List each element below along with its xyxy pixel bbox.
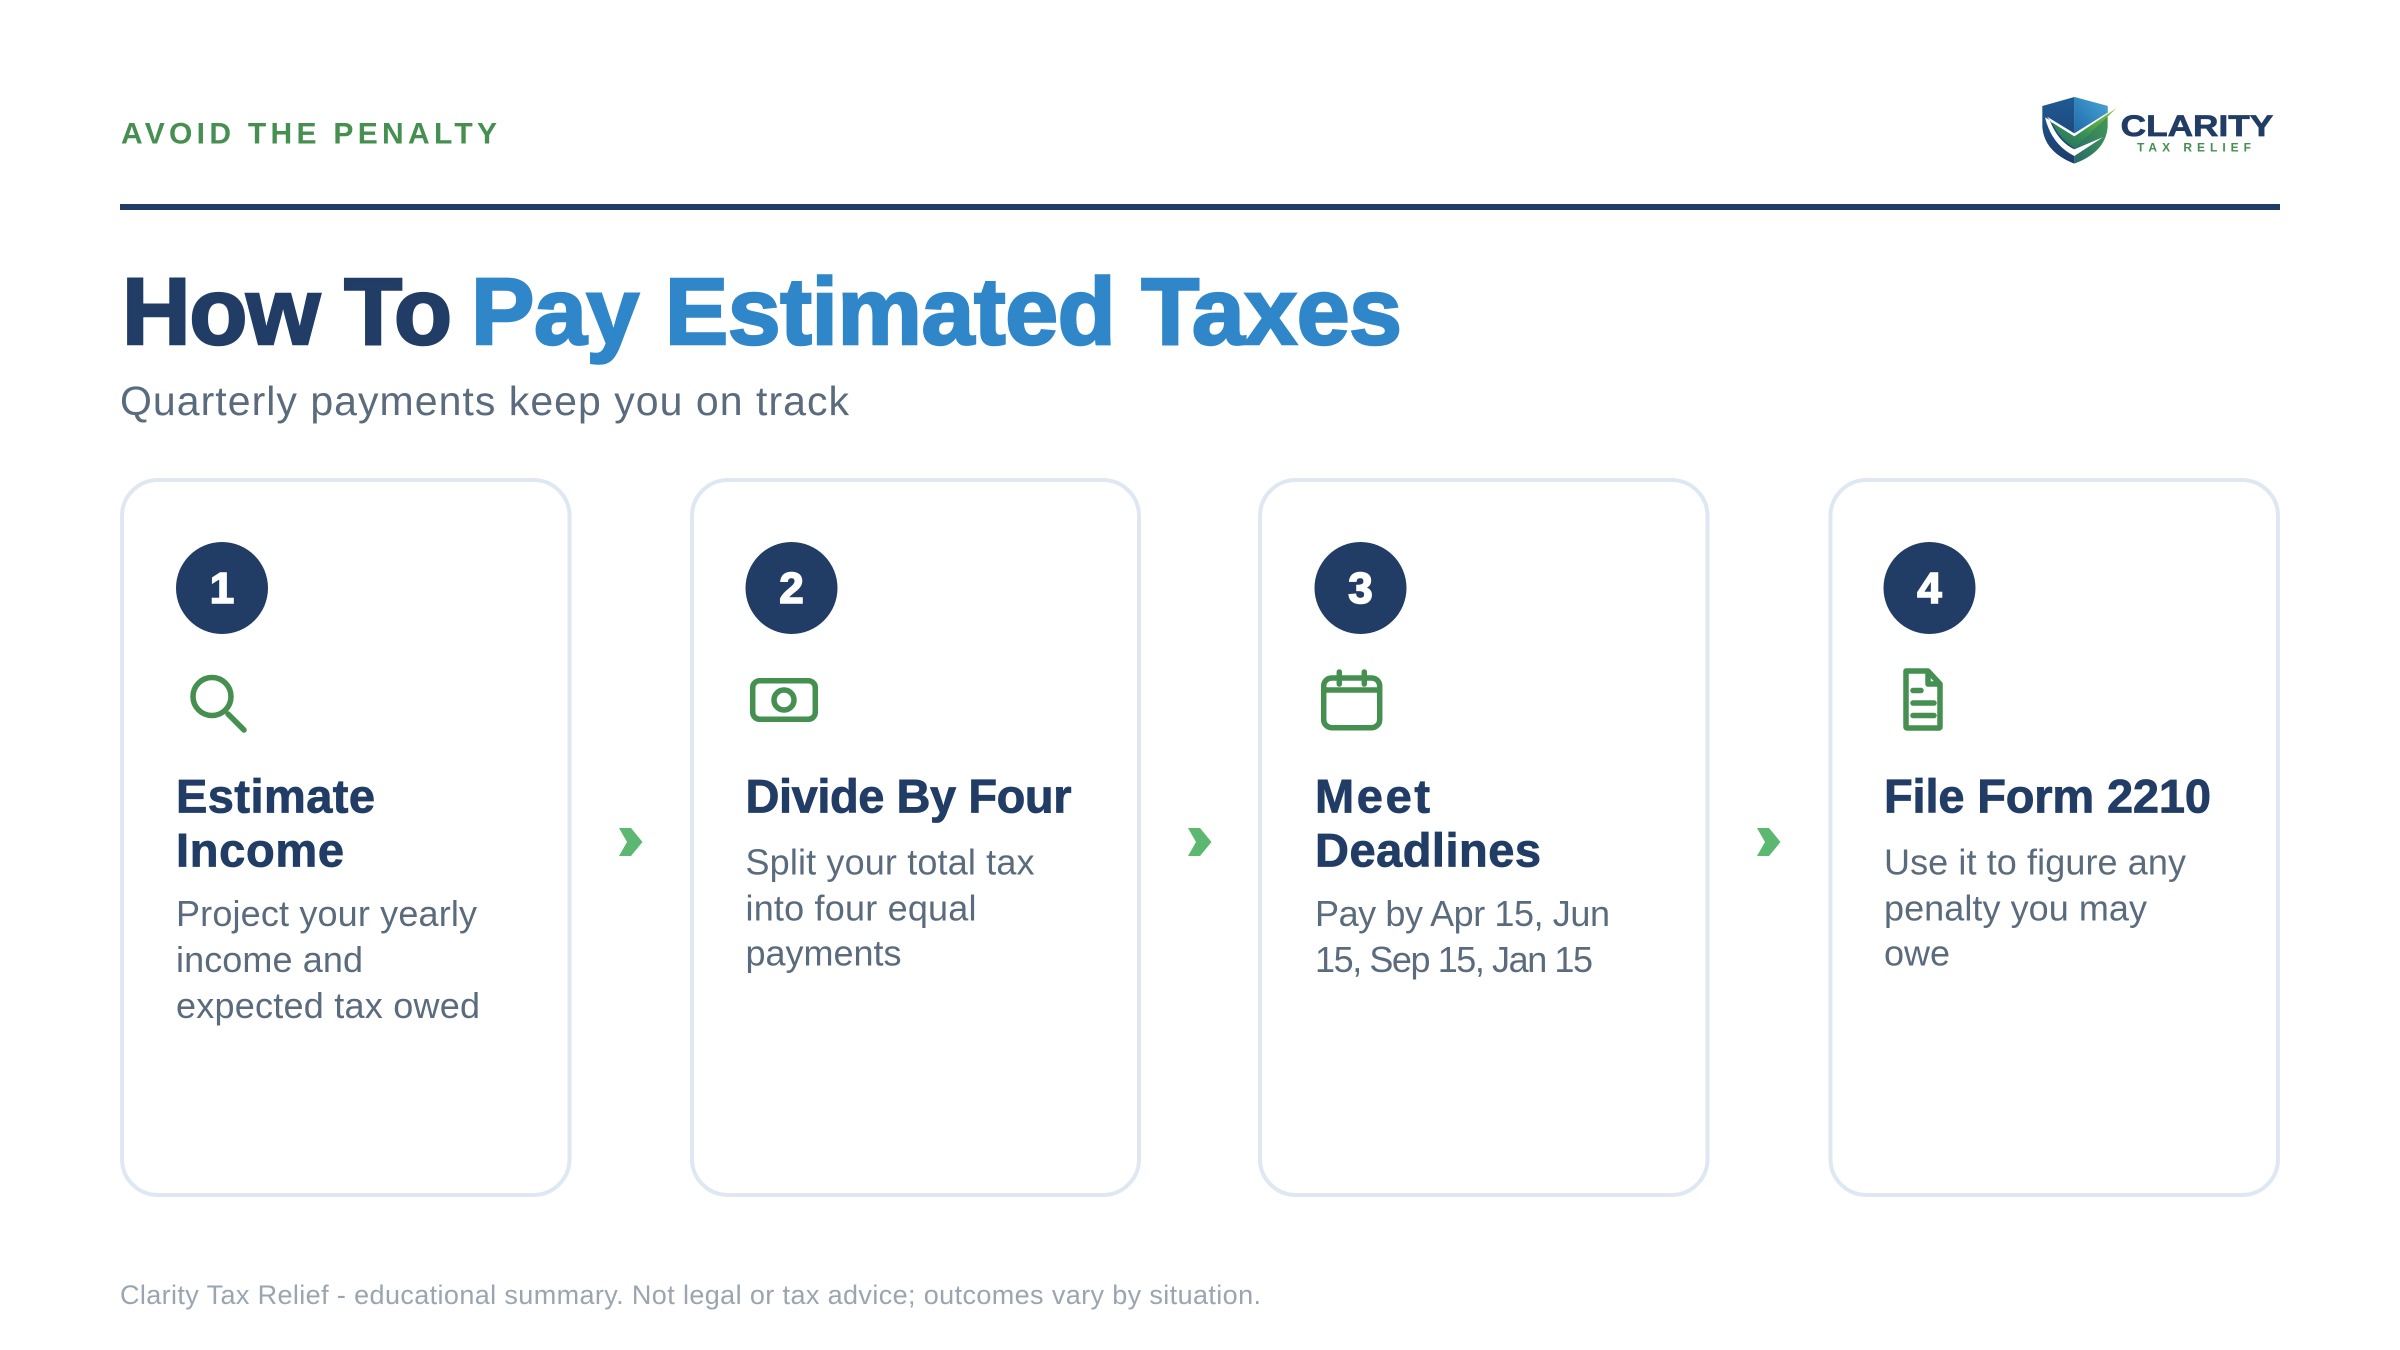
- step number 4: 4: [1917, 564, 1942, 613]
- panel: step 4 file form 2210: [1830, 480, 2278, 1195]
- text: meet deadlines description: Pay by Apr 15, Jun: [1315, 893, 1610, 934]
- text: divide by four description: into four equal: [746, 888, 976, 928]
- text: divide by four description: Split your total tax: [746, 842, 1034, 882]
- step number 2: [746, 542, 838, 634]
- step number 4: [1884, 542, 1976, 634]
- heading: file form 2210: File Form 2210: [1884, 770, 2211, 822]
- heading: meet deadlines: [1315, 770, 1541, 876]
- text: estimate income description: [176, 893, 480, 1026]
- text: file form 2210 description: [1884, 842, 2186, 974]
- step number 1: 1: [210, 564, 234, 613]
- text: divide by four description: [746, 842, 1034, 974]
- logo wordmark: [2121, 110, 2274, 155]
- icon: magnifying glass: [193, 678, 244, 730]
- arrow 3: [1757, 828, 1780, 856]
- arrow 1: [619, 828, 642, 856]
- text: estimate income description: expected tax owed: [176, 985, 480, 1026]
- icon: banknote: [753, 681, 815, 719]
- text: file form 2210 description: owe: [1884, 932, 1950, 974]
- icon: calendar: [1324, 672, 1380, 728]
- step number 3: 3: [1348, 564, 1373, 613]
- text: estimate income description: income and: [176, 939, 363, 980]
- icon: document: [1906, 671, 1940, 728]
- heading: estimate income: Estimate: [176, 770, 375, 822]
- title: Pay Estimated Taxes: [471, 259, 1402, 365]
- heading: meet deadlines: Deadlines: [1315, 824, 1541, 876]
- header rule: [120, 204, 2280, 210]
- panel: step 1 estimate income: [122, 480, 570, 1195]
- heading: divide by four: Divide By Four: [746, 770, 1072, 822]
- logo shield: [2042, 97, 2117, 164]
- step number 1: [176, 542, 268, 634]
- logo: Clarity Tax Relief: [2042, 97, 2274, 164]
- heading: meet deadlines: Meet: [1315, 770, 1430, 822]
- logo wordmark: TAX RELIEF: [2137, 141, 2251, 155]
- subtitle: Quarterly payments keep you on track: [120, 378, 850, 424]
- title: How To: [122, 259, 452, 365]
- text: file form 2210 description: penalty you may: [1884, 888, 2147, 928]
- panel: step 3 meet deadlines: [1260, 480, 1708, 1195]
- text: meet deadlines description: [1315, 893, 1610, 980]
- arrow 2: [1188, 828, 1212, 856]
- text: meet deadlines description: 15, Sep 15, Jan 15: [1315, 939, 1593, 980]
- text: estimate income description: Project your yearly: [176, 893, 477, 934]
- eyebrow: avoid the penalty: AVOID THE PENALTY: [121, 118, 497, 150]
- heading: estimate income: [176, 770, 375, 876]
- step number 3: [1314, 542, 1406, 634]
- step number 2: 2: [779, 564, 804, 613]
- heading: estimate income: Income: [176, 824, 344, 876]
- text: divide by four description: payments: [746, 932, 902, 974]
- text: file form 2210 description: Use it to figure any: [1884, 842, 2186, 882]
- logo wordmark: CLARITY: [2121, 110, 2274, 143]
- footer disclaimer: Clarity Tax Relief - educational summary. Not legal or tax advice; outcomes vary by situation.: [120, 1280, 1261, 1310]
- panel: step 2 divide by four: [692, 480, 1139, 1195]
